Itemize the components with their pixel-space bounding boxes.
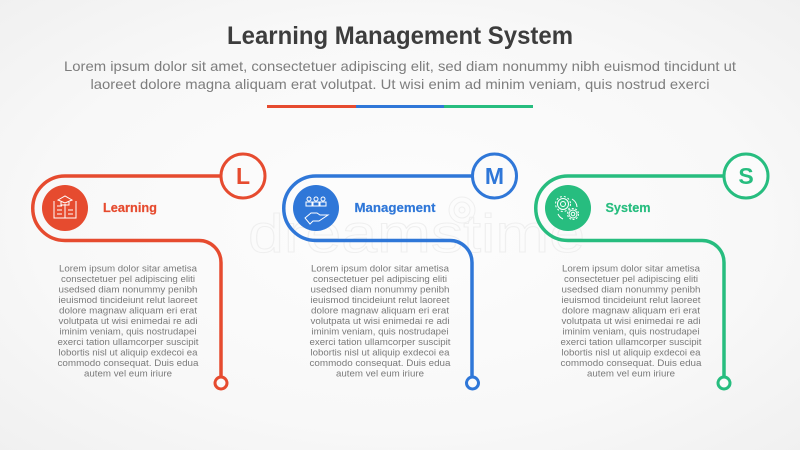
body text: management: consectetuer pel adipiscing eliti [313, 274, 447, 284]
body text: management: ieuismod tincideiunt relut laoreet [310, 295, 450, 305]
letter badge: M [472, 154, 516, 198]
panel: management [284, 154, 516, 389]
body text: management [310, 264, 451, 378]
body text: management: iminim veniam, quis nostrudapei [312, 326, 449, 336]
heading: Learning: Learning [103, 200, 157, 215]
body text: system: commodo consequat. Duis edua [560, 358, 702, 368]
body text: management: exerci tation ullamcorper suscipit [310, 337, 451, 347]
body text: learning: dolore magnaw aliquam eri erat [59, 306, 198, 316]
tricolor divider [267, 105, 533, 108]
letter badge: S: S [738, 163, 754, 189]
body text: system: volutpata ut wisi enimedai re adi [562, 316, 701, 326]
body text: management: lobortis nisl ut aliquip exdecoi ea [310, 348, 450, 358]
subtitle text [64, 58, 736, 92]
body text: system: lobortis nisl ut aliquip exdecoi ea [562, 348, 701, 358]
body text: system: Lorem ipsum dolor sitar ametisa [562, 264, 700, 274]
letter badge: L [221, 154, 265, 198]
body text: learning: commodo consequat. Duis edua [58, 358, 199, 368]
body text: management: autem vel eum iriure [336, 368, 424, 378]
body text: learning [58, 264, 199, 378]
body text: system: autem vel eum iriure [587, 368, 675, 378]
body text: learning: ieuismod tincideiunt relut laoreet [58, 295, 198, 305]
connector line: system [536, 176, 724, 378]
letter badge: L: L [236, 163, 250, 189]
icon: hand holding people [293, 185, 339, 231]
connector line: management [284, 176, 472, 378]
body text: management: usedsed diam nonummy penibh [310, 284, 450, 294]
letter badge: S [724, 154, 768, 198]
body text: learning: exerci tation ullamcorper suscipit [58, 337, 199, 347]
body text: system: exerci tation ullamcorper suscipit [560, 337, 702, 347]
body text: system [560, 264, 702, 378]
heading: Management: Management [354, 200, 436, 215]
body text: management: commodo consequat. Duis edua [310, 358, 451, 368]
panel: system [536, 154, 768, 389]
title: Learning Management System [227, 22, 573, 50]
end node: management [466, 377, 478, 389]
body text: learning: autem vel eum iriure [84, 368, 172, 378]
body text: learning: Lorem ipsum dolor sitar ametisa [59, 264, 197, 274]
body text: learning: lobortis nisl ut aliquip exdecoi ea [58, 348, 198, 358]
subtitle text: Lorem ipsum dolor sit amet, consectetuer adipiscing elit, sed diam nonummy nibh euismod tincidunt ut [64, 58, 736, 74]
body text: management: volutpata ut wisi enimedai re adi [310, 316, 450, 326]
icon: gears [545, 185, 591, 231]
body text: system: usedsed diam nonummy penibh [562, 284, 701, 294]
icon: book with graduation cap [42, 185, 88, 231]
end node: system [718, 377, 730, 389]
text: dreamstime [248, 204, 585, 264]
body text: learning: consectetuer pel adipiscing eliti [61, 274, 195, 284]
letter badge: M: M [485, 163, 504, 189]
body text: learning: volutpata ut wisi enimedai re adi [58, 316, 198, 326]
body text: learning: usedsed diam nonummy penibh [58, 284, 198, 294]
body text: system: consectetuer pel adipiscing eliti [564, 274, 698, 284]
body text: learning: iminim veniam, quis nostrudapei [60, 326, 197, 336]
body text: system: ieuismod tincideiunt relut laoreet [562, 295, 701, 305]
body text: system: iminim veniam, quis nostrudapei [562, 326, 700, 336]
subtitle text: laoreet dolore magna aliquam erat volutpat. Ut wisi enim ad minim veniam, quis nostrud exerci [90, 76, 710, 92]
connector line: learning [33, 176, 221, 378]
heading: System: System [606, 200, 650, 215]
end node: learning [215, 377, 227, 389]
body text: system: dolore magnaw aliquam eri erat [562, 306, 701, 316]
panel: learning [33, 154, 265, 389]
body text: management: dolore magnaw aliquam eri erat [311, 306, 450, 316]
body text: management: Lorem ipsum dolor sitar ametisa [311, 264, 449, 274]
